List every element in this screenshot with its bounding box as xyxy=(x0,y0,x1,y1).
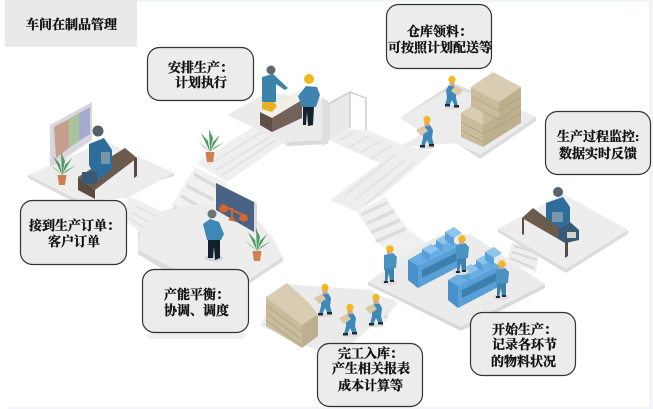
title box xyxy=(5,0,137,47)
stairs: production to finished goods xyxy=(356,292,396,322)
desk xyxy=(260,90,308,132)
callout: capacity balance: 产能平衡： xyxy=(164,287,229,302)
schedule board xyxy=(50,102,92,165)
scene: planning desk xyxy=(197,66,320,162)
scene: monitoring desk xyxy=(522,187,579,258)
callout: finished goods xyxy=(318,344,422,406)
machine xyxy=(408,227,462,288)
box stack xyxy=(266,283,318,348)
worker carrying box xyxy=(314,284,333,318)
plant xyxy=(197,129,224,162)
callout: receive order xyxy=(20,200,126,264)
scene: finished goods xyxy=(266,283,384,348)
corridor: order to balance xyxy=(127,197,200,238)
worker with hard hat xyxy=(298,74,320,126)
worker carrying box xyxy=(339,304,358,338)
callout: schedule production: 安排生产： xyxy=(168,60,233,75)
callout: finished goods: 完工入库： xyxy=(338,346,403,361)
standing planner xyxy=(203,210,224,262)
platform: production xyxy=(368,234,545,331)
title box: 车间在制品管理 xyxy=(26,17,117,32)
callout: capacity balance xyxy=(142,270,248,332)
corridor: door to warehouse xyxy=(328,129,403,163)
callout: schedule production: 计划执行 xyxy=(175,75,227,90)
stairs: to production xyxy=(357,197,433,262)
plant xyxy=(244,228,271,261)
scene: balance xyxy=(203,183,271,262)
platform: monitoring xyxy=(498,194,628,273)
callout: process monitoring: 生产过程监控: xyxy=(557,129,639,144)
stairs: production to monitoring xyxy=(506,243,540,272)
callout: schedule production xyxy=(148,48,254,100)
callout: start production: 记录各环节 xyxy=(492,337,557,352)
platform: planning xyxy=(227,93,328,146)
isometric floor plan xyxy=(28,83,628,350)
balance board xyxy=(216,183,257,233)
callout: finished goods: 产生相关报表 xyxy=(332,361,410,376)
callout: start production xyxy=(470,312,576,376)
scene: production line xyxy=(381,227,509,308)
callout: process monitoring: 数据实时反馈 xyxy=(559,146,637,161)
callout: warehouse picking: 仓库领料： xyxy=(407,24,472,39)
operator on phone xyxy=(381,245,397,285)
platform: balance xyxy=(138,203,283,283)
seated operator xyxy=(82,126,112,184)
platform: finished goods xyxy=(260,284,398,350)
callout: finished goods: 成本计算等 xyxy=(338,378,403,393)
platform: warehouse xyxy=(400,83,536,159)
callout: capacity balance: 协调、调度 xyxy=(164,303,229,318)
door xyxy=(322,92,366,146)
box stack xyxy=(461,72,521,147)
callout: receive order: 接到生产订单： xyxy=(29,218,120,233)
desk xyxy=(78,148,137,199)
callout: receive order: 客户订单 xyxy=(48,234,100,249)
worker carrying box xyxy=(416,116,435,150)
corridor: plant to planning xyxy=(197,127,283,182)
desk xyxy=(522,208,579,258)
machine operator xyxy=(453,235,469,275)
scene: order desk xyxy=(49,102,137,199)
plant xyxy=(49,152,76,185)
scene: warehouse xyxy=(416,72,521,150)
callout: process monitoring xyxy=(546,112,650,174)
worker carrying box xyxy=(444,76,463,110)
worker carrying box xyxy=(365,294,384,328)
callout: start production: 开始生产： xyxy=(492,322,557,337)
platform: order desk xyxy=(28,141,174,205)
machine operator xyxy=(493,260,509,300)
seated operator xyxy=(546,187,570,232)
corridor: warehouse to stairs xyxy=(330,145,433,212)
stairs: balance to plant xyxy=(172,167,228,222)
callout: warehouse picking xyxy=(386,4,492,68)
manager xyxy=(262,66,288,102)
callout shadow xyxy=(147,333,245,339)
callout: start production: 的物料状况 xyxy=(491,354,556,369)
machine xyxy=(448,247,502,308)
callout: warehouse picking: 可按照计划配送等 xyxy=(388,40,492,55)
